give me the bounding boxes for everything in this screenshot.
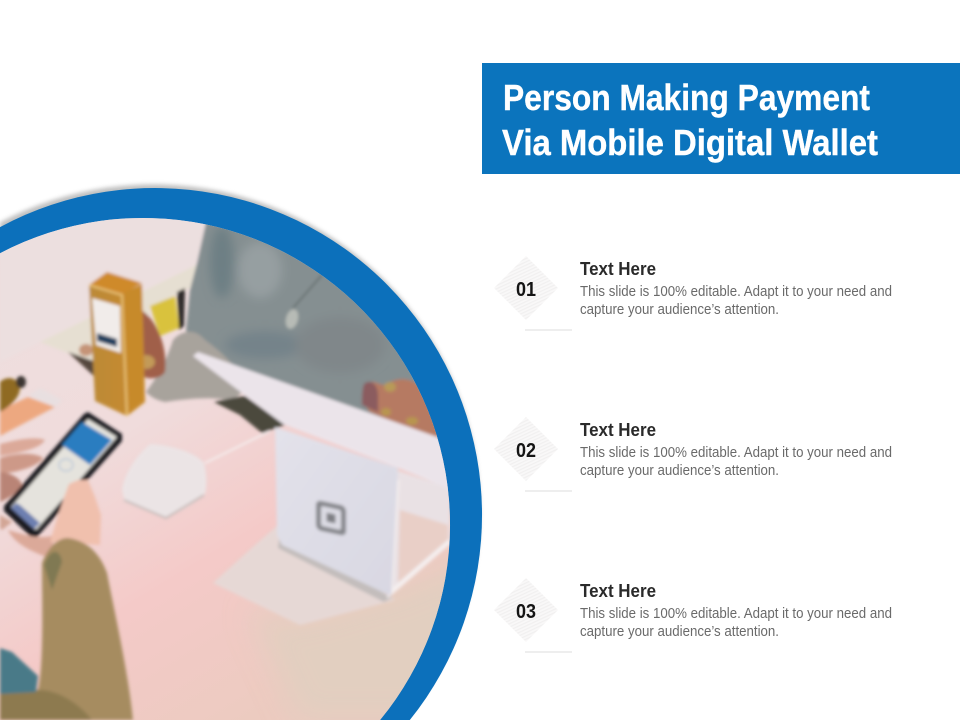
item 01 text [580,259,892,318]
item 01 text: This slide is 100% editable. Adapt it to your need and [580,284,892,300]
terminal back frame [392,470,450,590]
back desk [0,218,208,317]
diamond badge 01: 01 [516,279,536,301]
item 02 text: capture your audience’s attention. [580,463,779,479]
wallet card on screen [62,422,112,465]
left fingers [0,438,45,456]
gold box [122,284,145,416]
item 02 text [580,420,892,479]
item 03 [494,578,892,652]
terminal screen [193,352,452,490]
blue ring [0,188,482,720]
terminal rim [386,540,450,598]
item 01 text: Text Here [580,259,656,279]
person sweater [184,224,416,418]
title banner: Person Making Payment [503,77,870,118]
smartphone [4,412,122,537]
back hand under phone [8,530,55,558]
sweater sleeve [146,332,248,402]
item 01 text: capture your audience’s attention. [580,302,779,318]
item 01 [494,256,892,330]
terminal table shadow [213,525,395,625]
photo base [0,200,470,720]
sweater tones [208,228,299,358]
ring shadow [0,184,480,720]
title banner: Via Mobile Digital Wallet [502,122,878,163]
knit sleeve [36,536,135,720]
yellow patch [150,296,179,336]
item 02 text: Text Here [580,420,656,440]
diamond badge 03: 03 [516,601,536,623]
photo: payment counter scene [0,200,470,720]
item 03 text: Text Here [580,581,656,601]
orange card [0,397,55,436]
square logo [316,500,346,536]
diamond badge 01 [494,256,558,320]
diamond badge 02 [494,417,558,481]
gold bottle [0,378,20,412]
necklace pendant [284,308,300,330]
item 03 text [580,581,892,640]
item 02 [494,417,892,491]
dark gap under screen [214,396,285,433]
box white label [92,298,121,353]
hand holding box [138,310,165,378]
white reader box [122,444,206,517]
reader cable [205,431,270,463]
desk cream edge [44,268,194,363]
jeans [0,648,38,694]
item 03 text: This slide is 100% editable. Adapt it to your need and [580,606,892,622]
diamond badge 03 [494,578,558,642]
dark recess shadow [68,352,96,378]
thumb and palm [50,480,101,545]
title banner [482,63,960,174]
circular photo with blue ring [0,184,482,720]
item 02 text: This slide is 100% editable. Adapt it to your need and [580,445,892,461]
right hand with gold nails [366,378,437,438]
diamond badge 02: 02 [516,440,536,462]
photo objects [0,218,470,720]
bottom right table tone [266,557,448,720]
terminal stand [275,427,398,596]
item 03 text: capture your audience’s attention. [580,624,779,640]
